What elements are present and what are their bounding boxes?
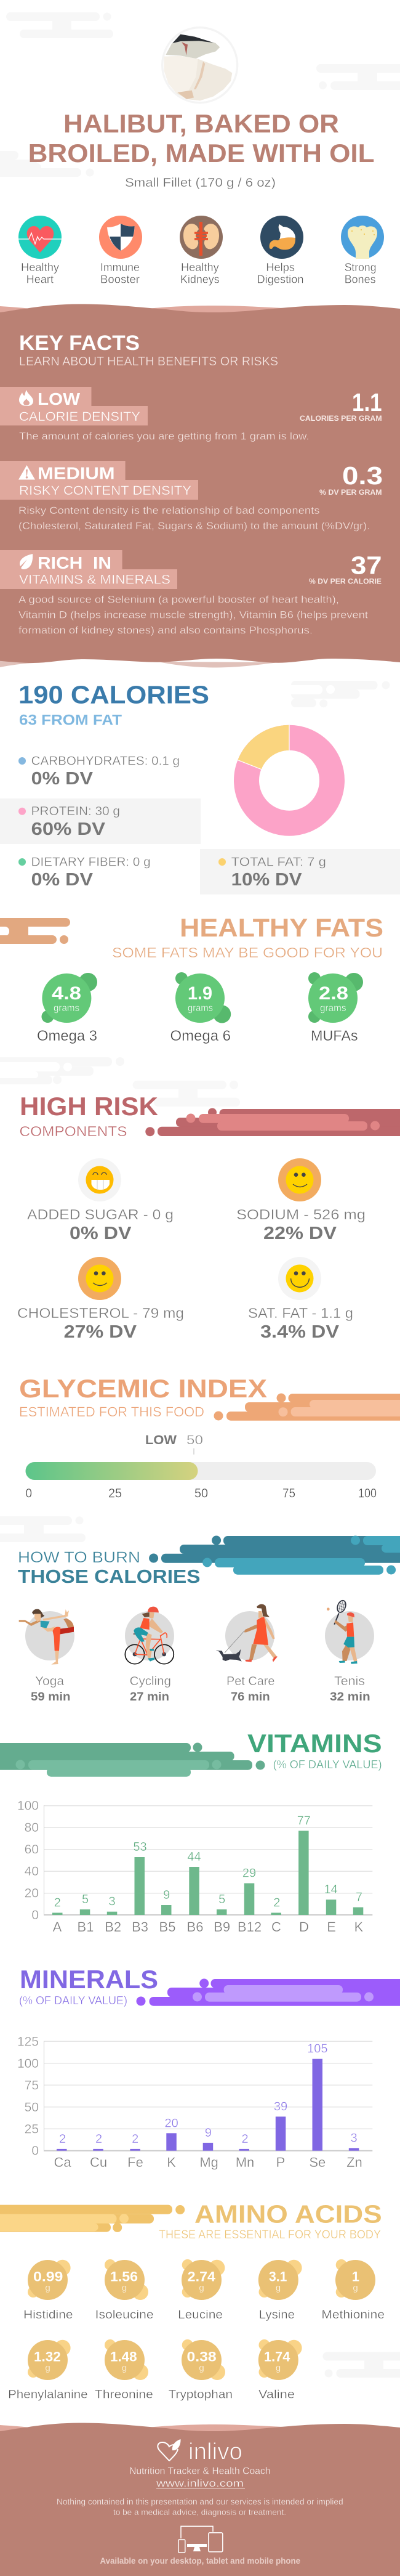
decorative blob: high risk: [145, 1108, 400, 1136]
legend item: protein: PROTEIN: 30 g: [31, 805, 120, 818]
badge: MUFAs: grams: [320, 1003, 346, 1014]
title: BROILED, MADE WITH OIL: [28, 139, 375, 168]
chart: minerals bar chart: 50: [25, 2100, 39, 2115]
badge: valine: Valine: [258, 2389, 295, 2402]
chart: minerals bar chart: Mn: [236, 2155, 254, 2170]
heading: key facts: LEARN ABOUT HEALTH BENEFITS OR RISKS: [19, 355, 278, 368]
icon: immune booster: Immune: [100, 261, 140, 274]
burn section decoration: [0, 1516, 86, 1542]
heading: amino acids: AMINO ACIDS: [194, 2200, 382, 2228]
chart: vitamins bar chart: 77: [297, 1814, 311, 1827]
chart: glycemic index gauge: 75: [282, 1487, 295, 1501]
fact: rich in vitamins and minerals: 37: [351, 551, 382, 580]
badge: valine: [258, 2339, 302, 2402]
activity: cycling: Cycling: [130, 1675, 171, 1688]
badge: valine: g: [276, 2363, 281, 2373]
chart: vitamins bar chart: 0: [31, 1908, 39, 1922]
fact: medium risky content density: Risky Content density is the relationship of bad components: [18, 505, 320, 516]
chart: vitamins bar chart: 2: [54, 1896, 61, 1910]
legend item: total fat: 10% DV: [231, 870, 302, 890]
badge: omega 3: 4.8: [52, 983, 81, 1004]
badge: methionine: g: [353, 2283, 358, 2293]
macronutrient legend: [0, 755, 400, 895]
component: added sugar: 0% DV: [70, 1224, 132, 1243]
heading: high risk: COMPONENTS: [20, 1123, 127, 1139]
badge: omega 6: grams: [188, 1003, 213, 1014]
component: cholesterol: [17, 1257, 184, 1342]
chart: minerals bar chart: 2: [132, 2132, 138, 2146]
badge: histidine: [23, 2260, 73, 2322]
chart: vitamins bar chart: B3: [132, 1919, 148, 1935]
badge: valine: 1.74: [264, 2349, 290, 2365]
legend item: total fat: [200, 849, 400, 895]
fact: medium risky content density: [0, 461, 383, 532]
heading: amino acids: THESE ARE ESSENTIAL FOR YOUR BODY: [159, 2229, 381, 2241]
chart: vitamins bar chart: 9: [163, 1888, 170, 1902]
heading: calories: 63 FROM FAT: [19, 712, 122, 729]
badge: histidine: g: [45, 2283, 50, 2293]
fact: rich in vitamins and minerals: formation of kidney stones) and also contains Phosphorus.: [18, 625, 313, 636]
activity: pet care: Pet Care: [226, 1675, 274, 1688]
badge: histidine: Histidine: [23, 2309, 73, 2322]
badge: lysine: 3.1: [269, 2269, 287, 2285]
chart: vitamins bar chart: B12: [238, 1919, 262, 1935]
icon: healthy heart: Heart: [26, 273, 54, 285]
tagline and website: Nutrition Tracker & Health Coach: [129, 2466, 271, 2476]
fact: rich in vitamins and minerals: VITAMINS & MINERALS: [19, 573, 170, 587]
fact: rich in vitamins and minerals: Vitamin D (helps increase muscle strength), Vitamin B6 (helps prevent: [18, 610, 368, 621]
badge: phenylalanine: Phenylalanine: [8, 2389, 88, 2402]
fact: medium risky content density: % DV PER GRAM: [319, 489, 382, 497]
panel: footer: [0, 2423, 400, 2576]
chart: minerals bar chart: P: [276, 2155, 285, 2170]
chart: vitamins bar chart: 14: [324, 1883, 338, 1896]
chart: glycemic index gauge: 25: [108, 1487, 122, 1501]
activity: yoga: [19, 1609, 74, 1704]
chart: glycemic index gauge: 100: [358, 1487, 377, 1501]
heading: minerals: [19, 1965, 158, 2007]
badge: phenylalanine: 1.32: [34, 2349, 61, 2365]
availability note: Available on your desktop, tablet and mobile phone: [100, 2556, 300, 2566]
icon: warning triangle: [18, 465, 35, 479]
fact: medium risky content density: MEDIUM: [38, 464, 115, 483]
chart: vitamins bar chart: E: [327, 1919, 336, 1935]
activity: yoga: 59 min: [31, 1691, 70, 1704]
heading: vitamins: [247, 1729, 382, 1771]
chart: vitamins bar chart: 100: [17, 1799, 39, 1813]
heading: high risk: [20, 1092, 158, 1139]
badge: leucine: [178, 2259, 225, 2322]
component: added sugar: ADDED SUGAR - 0 g: [27, 1206, 174, 1222]
heading: vitamins: (% OF DAILY VALUE): [273, 1758, 382, 1771]
icon: strong bones: [341, 216, 384, 285]
component: saturated fat: [248, 1257, 353, 1342]
activity: tennis: 32 min: [330, 1691, 370, 1704]
heading: amino acids: [159, 2200, 382, 2241]
badge: tryptophan: g: [199, 2363, 204, 2373]
chart: minerals bar chart: 25: [25, 2122, 39, 2136]
logo: inlivo: inlivo: [188, 2439, 242, 2465]
chart: minerals bar chart: 105: [307, 2042, 327, 2056]
chart: glycemic index gauge: LOW: [145, 1433, 177, 1447]
fact: low calorie density: LOW: [38, 389, 81, 408]
chart: glycemic index gauge: 50: [194, 1487, 208, 1501]
badge: isoleucine: [95, 2259, 154, 2322]
chart: vitamins bar chart: K: [354, 1919, 364, 1935]
health benefit icons row: [18, 216, 384, 285]
badge: omega 3: Omega 3: [37, 1028, 97, 1044]
chart: vitamins bar chart: B6: [187, 1919, 203, 1935]
heading: healthy fats: SOME FATS MAY BE GOOD FOR YOU: [112, 945, 383, 961]
chart: vitamins bar chart: 40: [25, 1864, 39, 1879]
icon: strong bones: Strong: [345, 261, 377, 274]
panel: key facts: [0, 304, 400, 668]
decorative blob: minerals: [137, 1979, 400, 2006]
logo: inlivo: [158, 2439, 242, 2465]
fact: low calorie density: The amount of calories you are getting from 1 gram is low.: [19, 431, 309, 442]
badge: phenylalanine: g: [45, 2363, 50, 2373]
chart: vitamins bar chart: B2: [105, 1919, 121, 1935]
fact: rich in vitamins and minerals: % DV PER CALORIE: [309, 579, 382, 586]
chart: vitamins bar chart: 5: [218, 1893, 225, 1906]
chart: minerals bar chart: Mg: [199, 2155, 218, 2170]
badge: tryptophan: [169, 2339, 233, 2402]
heading: minerals: MINERALS: [20, 1965, 158, 1994]
component: sodium: [236, 1158, 366, 1243]
tagline and website: [129, 2466, 271, 2489]
chart: vitamins bar chart: 20: [25, 1887, 39, 1901]
badge: methionine: 1: [352, 2269, 359, 2285]
chart: vitamins bar chart: 3: [108, 1895, 116, 1909]
chart: vitamins bar chart: B9: [214, 1919, 230, 1935]
heading: healthy fats: [112, 913, 383, 961]
amino acid badges: [8, 2259, 385, 2402]
high risk components grid: [17, 1158, 366, 1342]
title: [28, 109, 375, 168]
activity: cycling: [125, 1607, 174, 1704]
badge: leucine: g: [199, 2283, 204, 2293]
icon: helps digestion: [257, 216, 304, 285]
badge: phenylalanine: [8, 2340, 88, 2402]
healthy fats badges: [37, 972, 363, 1044]
chart: minerals bar chart: 2: [59, 2132, 66, 2146]
badge: omega 3: grams: [54, 1003, 79, 1014]
badge: leucine: 2.74: [188, 2269, 216, 2285]
fact: rich in vitamins and minerals: [0, 550, 382, 636]
chart: vitamins bar chart: 2: [273, 1896, 280, 1910]
icon: healthy heart: Healthy: [21, 261, 59, 274]
chart: minerals bar chart: 125: [17, 2034, 39, 2049]
decorative blob: glycemic index: [214, 1394, 400, 1421]
decorative blob: amino acids: [0, 2205, 185, 2232]
heading: healthy fats: HEALTHY FATS: [180, 913, 383, 942]
legend item: protein: 60% DV: [31, 819, 106, 839]
badge: isoleucine: g: [122, 2283, 127, 2293]
chart: vitamins bar chart: 7: [356, 1891, 362, 1904]
chart: glycemic index gauge: [26, 1433, 377, 1501]
component: cholesterol: CHOLESTEROL - 79 mg: [17, 1305, 184, 1321]
chart: minerals bar chart: 2: [95, 2132, 102, 2146]
legend item: dietary fiber: 0% DV: [31, 870, 94, 890]
calories section decoration: [286, 681, 390, 707]
legend item: total fat: TOTAL FAT: 7 g: [231, 856, 326, 869]
component: saturated fat: SAT. FAT - 1.1 g: [248, 1305, 353, 1321]
decorative blob: burn calories: [149, 1535, 400, 1575]
badge: MUFAs: [308, 972, 363, 1044]
heading: key facts: KEY FACTS: [19, 331, 140, 355]
chart: minerals bar chart: 20: [164, 2116, 178, 2130]
chart: minerals bar chart: 2: [241, 2132, 249, 2146]
icon: immune booster: Booster: [100, 273, 140, 285]
heading: minerals: (% OF DAILY VALUE): [19, 1994, 127, 2007]
chart: vitamins bar chart: [17, 1799, 372, 1935]
badge: histidine: 0.99: [33, 2269, 63, 2285]
serving size: Small Fillet (170 g / 6 oz): [125, 176, 276, 190]
chart: minerals bar chart: 75: [25, 2078, 39, 2092]
icon: healthy kidneys: [180, 216, 223, 285]
chart: minerals bar chart: [17, 2034, 372, 2170]
icon: devices: [178, 2526, 223, 2553]
chart: minerals bar chart: 9: [205, 2126, 212, 2140]
badge: threonine: g: [122, 2363, 127, 2373]
chart: macronutrient donut: [238, 725, 332, 823]
high risk section decoration: [0, 1057, 240, 1107]
badge: threonine: 1.48: [110, 2349, 137, 2365]
legend item: carbohydrates: CARBOHYDRATES: 0.1 g: [31, 755, 180, 768]
heading: glycemic index: ESTIMATED FOR THIS FOOD: [19, 1404, 204, 1420]
component: saturated fat: 3.4% DV: [260, 1322, 340, 1342]
badge: MUFAs: MUFAs: [311, 1028, 358, 1044]
chart: vitamins bar chart: 53: [133, 1840, 147, 1854]
icon: leaf: [20, 554, 33, 569]
icon: helps digestion: Helps: [266, 261, 295, 274]
icon: immune booster: [99, 216, 142, 285]
badge: isoleucine: 1.56: [110, 2269, 138, 2285]
chart: glycemic index gauge: 50: [186, 1433, 203, 1447]
badge: methionine: [321, 2259, 385, 2322]
badge: threonine: Threonine: [95, 2389, 153, 2402]
chart: minerals bar chart: Cu: [90, 2155, 107, 2170]
badge: omega 6: 1.9: [188, 983, 212, 1004]
legend item: dietary fiber: [18, 856, 151, 890]
chart: glycemic index gauge: 0: [26, 1487, 32, 1501]
fact: medium risky content density: (Cholesterol, Saturated Fat, Sugars & Sodium) to the amount (%DV/gr).: [18, 521, 370, 532]
chart: vitamins bar chart: 44: [187, 1850, 201, 1864]
badge: leucine: Leucine: [178, 2309, 223, 2322]
heading: vitamins: VITAMINS: [247, 1729, 382, 1758]
chart: minerals bar chart: 0: [31, 2144, 39, 2158]
chart: vitamins bar chart: 60: [25, 1843, 39, 1857]
fact: rich in vitamins and minerals: A good source of Selenium (a powerful booster of heart health),: [18, 595, 339, 606]
decorative blob: healthy fats: [0, 918, 70, 944]
chart: minerals bar chart: Zn: [346, 2155, 362, 2170]
component: added sugar: [27, 1158, 174, 1243]
heading: glycemic index: [19, 1374, 267, 1420]
chart: vitamins bar chart: C: [271, 1919, 281, 1935]
fact: rich in vitamins and minerals: RICH IN: [38, 553, 111, 572]
badge: isoleucine: Isoleucine: [95, 2309, 154, 2322]
activity: tennis: [325, 1599, 374, 1704]
chart: vitamins bar chart: B1: [78, 1919, 94, 1935]
disclaimer: [57, 2497, 343, 2517]
badge: tryptophan: 0.38: [187, 2349, 217, 2365]
fact: medium risky content density: 0.3: [342, 461, 383, 490]
title: HALIBUT, BAKED OR: [63, 109, 339, 138]
fact: low calorie density: [0, 387, 382, 442]
heading: calories: [18, 681, 209, 729]
chart: minerals bar chart: 100: [17, 2057, 39, 2071]
disclaimer: Nothing contained in this presentation and our services is intended or implied: [57, 2497, 343, 2506]
badge: lysine: g: [276, 2283, 281, 2293]
chart: vitamins bar chart: B5: [159, 1919, 175, 1935]
icon: flame: [19, 390, 33, 406]
chart: minerals bar chart: K: [167, 2155, 176, 2170]
icon: helps digestion: Digestion: [257, 273, 304, 285]
heading: how to burn those calories: [18, 1549, 201, 1587]
disclaimer: to be a medical advice, diagnosis or treatment.: [113, 2508, 286, 2517]
chart: vitamins bar chart: D: [299, 1919, 309, 1935]
icon: strong bones: Bones: [345, 273, 376, 285]
activity: tennis: Tenis: [334, 1675, 365, 1688]
badge: threonine: [95, 2339, 153, 2402]
food photo: halibut fillet: [162, 28, 238, 103]
component: sodium: SODIUM - 526 mg: [236, 1206, 366, 1222]
badge: omega 6: Omega 6: [170, 1028, 231, 1044]
amino acids section decoration: [322, 2352, 400, 2378]
legend item: protein: [0, 798, 201, 844]
decorative blob: vitamins: [0, 1742, 265, 1777]
fact: low calorie density: CALORIES PER GRAM: [300, 415, 382, 423]
badge: lysine: [258, 2260, 302, 2322]
component: sodium: 22% DV: [263, 1224, 337, 1243]
heading: how to burn those calories: HOW TO BURN: [18, 1549, 140, 1566]
badge: lysine: Lysine: [259, 2309, 295, 2322]
chart: minerals bar chart: Ca: [54, 2155, 71, 2170]
badge: omega 3: [37, 973, 97, 1044]
icon: healthy kidneys: Healthy: [181, 261, 219, 274]
fact: low calorie density: 1.1: [352, 388, 382, 416]
badge: tryptophan: Tryptophan: [169, 2389, 233, 2402]
heading: key facts: [19, 331, 278, 368]
chart: minerals bar chart: 3: [350, 2131, 358, 2145]
chart: vitamins bar chart: 5: [82, 1893, 89, 1906]
legend item: carbohydrates: 0% DV: [31, 769, 94, 789]
activity: cycling: 27 min: [130, 1691, 169, 1704]
fact: medium risky content density: RISKY CONTENT DENSITY: [19, 484, 191, 498]
badge: MUFAs: 2.8: [319, 983, 348, 1004]
fact: low calorie density: CALORIE DENSITY: [19, 410, 140, 424]
chart: vitamins bar chart: 29: [242, 1867, 256, 1880]
heading: high risk: HIGH RISK: [20, 1092, 158, 1121]
tagline and website: www.inlivo.com: [156, 2477, 244, 2489]
legend item: carbohydrates: [18, 755, 180, 789]
header background decoration: [0, 12, 400, 177]
badge: methionine: Methionine: [321, 2309, 385, 2322]
activity: yoga: Yoga: [35, 1675, 65, 1688]
badge: omega 6: [170, 972, 231, 1044]
activity: pet care: [216, 1604, 278, 1704]
icon: healthy kidneys: Kidneys: [180, 273, 220, 285]
chart: minerals bar chart: 39: [274, 2100, 287, 2113]
legend item: dietary fiber: DIETARY FIBER: 0 g: [31, 856, 151, 869]
icon: healthy heart: [18, 216, 62, 285]
activity: pet care: 76 min: [231, 1691, 270, 1704]
chart: minerals bar chart: Se: [309, 2155, 326, 2170]
heading: glycemic index: GLYCEMIC INDEX: [19, 1374, 267, 1403]
chart: minerals bar chart: Fe: [127, 2155, 143, 2170]
heading: how to burn those calories: THOSE CALORIES: [18, 1566, 201, 1587]
chart: vitamins bar chart: A: [53, 1919, 62, 1935]
heading: calories: 190 CALORIES: [18, 681, 209, 709]
chart: vitamins bar chart: 80: [25, 1821, 39, 1835]
component: cholesterol: 27% DV: [64, 1322, 137, 1342]
